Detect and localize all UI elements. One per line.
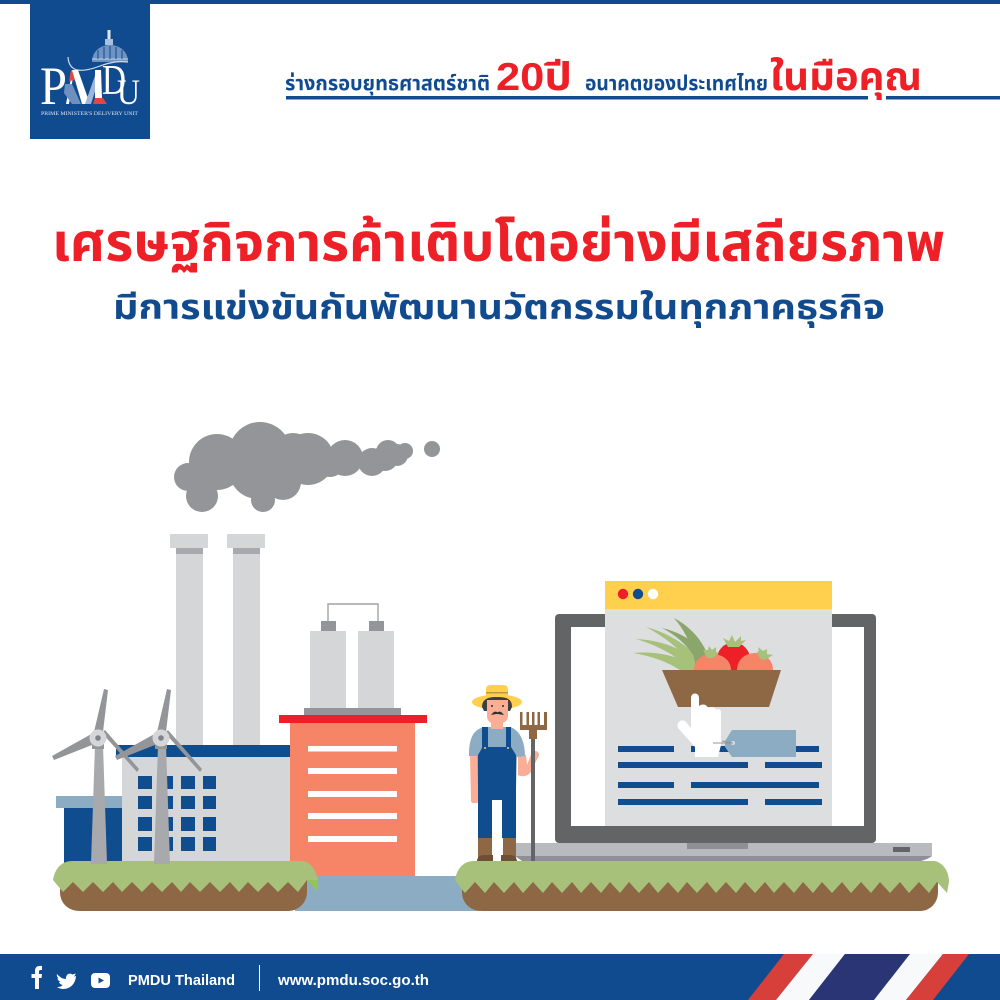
farmer boots xyxy=(478,838,516,858)
icon: twitter xyxy=(57,974,76,989)
tagline part 1: ร่างกรอบยุทธศาสตร์ชาติ xyxy=(285,73,490,95)
footer xyxy=(0,954,1000,1000)
right island xyxy=(455,861,949,911)
farmer head xyxy=(472,694,522,710)
flag stripes xyxy=(748,954,969,1000)
farmer right arm xyxy=(518,752,538,776)
laptop xyxy=(515,614,932,863)
logo caption: PRIME MINISTER'S DELIVERY UNIT xyxy=(41,112,138,117)
logo letter U: U xyxy=(117,72,140,112)
tanks on roof xyxy=(304,604,401,715)
laptop base xyxy=(515,843,932,863)
tagline in your hands: ในมือคุณ xyxy=(770,56,922,100)
logo letter P: P xyxy=(40,56,67,116)
footer divider xyxy=(259,965,260,991)
logo letter M xyxy=(64,70,107,104)
top bar xyxy=(0,0,1000,4)
small blue building xyxy=(56,796,124,864)
logo swoosh xyxy=(68,57,128,70)
pointing hand xyxy=(678,694,721,757)
chimney right xyxy=(227,534,265,745)
vegetable basket xyxy=(633,618,781,707)
farmer shirt xyxy=(469,727,525,790)
browser window xyxy=(605,581,832,826)
logo letter D: D xyxy=(102,58,126,104)
farmer xyxy=(469,685,547,862)
wind turbine right xyxy=(115,689,202,864)
laptop screen xyxy=(555,614,876,843)
orange building xyxy=(279,715,427,876)
footer website: www.pmdu.soc.go.th xyxy=(277,973,429,989)
farmer left arm xyxy=(470,754,478,803)
icon: smoke cloud xyxy=(174,422,440,512)
wind turbine left xyxy=(52,689,139,864)
header underline xyxy=(286,96,1000,100)
subtitle: มีการแข่งขันกันพัฒนานวัตกรรมในทุกภาคธุรกิจ xyxy=(113,288,885,328)
footer page name: PMDU Thailand xyxy=(128,973,235,989)
logo dome xyxy=(92,30,128,62)
icon: facebook xyxy=(32,966,42,989)
left island xyxy=(53,861,318,911)
text lines xyxy=(618,746,822,805)
factory windows xyxy=(138,776,216,851)
main title: เศรษฐกิจการค้าเติบโตอย่างมีเสถียรภาพ xyxy=(52,214,945,273)
factory building xyxy=(116,745,290,863)
farmer overalls xyxy=(478,727,516,838)
tagline part 2: อนาคตของประเทศไทย xyxy=(585,73,768,95)
water xyxy=(295,876,480,911)
header tagline xyxy=(285,56,1000,100)
tag string xyxy=(713,741,733,743)
icon: youtube xyxy=(91,973,110,988)
tagline 20 years: 20ปี xyxy=(496,56,572,99)
chimney left xyxy=(170,534,208,745)
logo: PMDU xyxy=(30,4,150,139)
price tag xyxy=(725,730,796,757)
pitchfork xyxy=(520,712,547,862)
